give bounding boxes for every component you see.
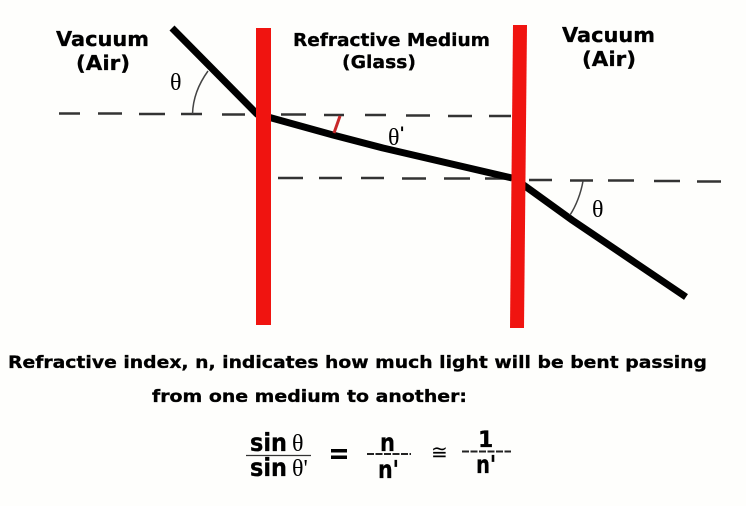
label: vacuum right: (Air) bbox=[582, 47, 636, 71]
symbol: theta prime: θ bbox=[388, 125, 400, 151]
label: vacuum right bbox=[562, 23, 655, 71]
fraction n over n prime: n' bbox=[378, 455, 399, 484]
approximately equal sign: ≅ bbox=[431, 442, 448, 464]
fraction sin theta over sin theta prime: θ' bbox=[292, 456, 308, 482]
exit ray bbox=[518, 181, 686, 297]
fraction sin theta over sin theta prime: sin bbox=[250, 428, 287, 457]
left glass surface bbox=[256, 28, 271, 325]
refracted ray in glass bbox=[268, 117, 512, 178]
label: vacuum right: Vacuum bbox=[562, 23, 655, 47]
angle arc theta incident bbox=[192, 71, 208, 114]
label: refractive medium: (Glass) bbox=[342, 52, 416, 73]
label: vacuum left: (Air) bbox=[76, 51, 130, 75]
fraction n over n prime: n bbox=[380, 428, 395, 457]
label: refractive medium: Refractive Medium bbox=[293, 30, 490, 51]
label: vacuum left: Vacuum bbox=[56, 27, 149, 51]
fraction sin theta over sin theta prime: θ bbox=[292, 431, 304, 457]
fraction sin theta over sin theta prime: sin bbox=[250, 453, 287, 482]
dashed normal line: lower right bbox=[278, 178, 721, 182]
angle arc theta exit bbox=[570, 181, 583, 215]
label: refractive medium bbox=[293, 30, 490, 73]
symbol: theta prime: ' bbox=[400, 124, 405, 144]
symbol: theta exit: θ bbox=[592, 197, 604, 223]
fraction 1 over n prime: 1 bbox=[478, 428, 493, 453]
fraction 1 over n prime: n' bbox=[476, 450, 496, 479]
explanation text: Refractive index, n, indicates how much light will be bent passing bbox=[8, 353, 707, 372]
label: vacuum left bbox=[56, 27, 149, 75]
fraction sin theta over sin theta prime bbox=[246, 428, 311, 482]
equals sign bbox=[331, 449, 347, 459]
explanation text bbox=[8, 353, 707, 406]
symbol: theta incident: θ bbox=[170, 70, 182, 96]
dashed normal line: left upper bbox=[59, 114, 511, 116]
fraction n over n prime bbox=[367, 428, 411, 484]
explanation text: from one medium to another: bbox=[152, 387, 467, 406]
fraction 1 over n prime bbox=[462, 428, 511, 479]
incident ray bbox=[172, 28, 258, 115]
equation bbox=[246, 428, 511, 484]
right glass surface bbox=[510, 25, 527, 328]
angle mark theta prime bbox=[334, 116, 340, 133]
